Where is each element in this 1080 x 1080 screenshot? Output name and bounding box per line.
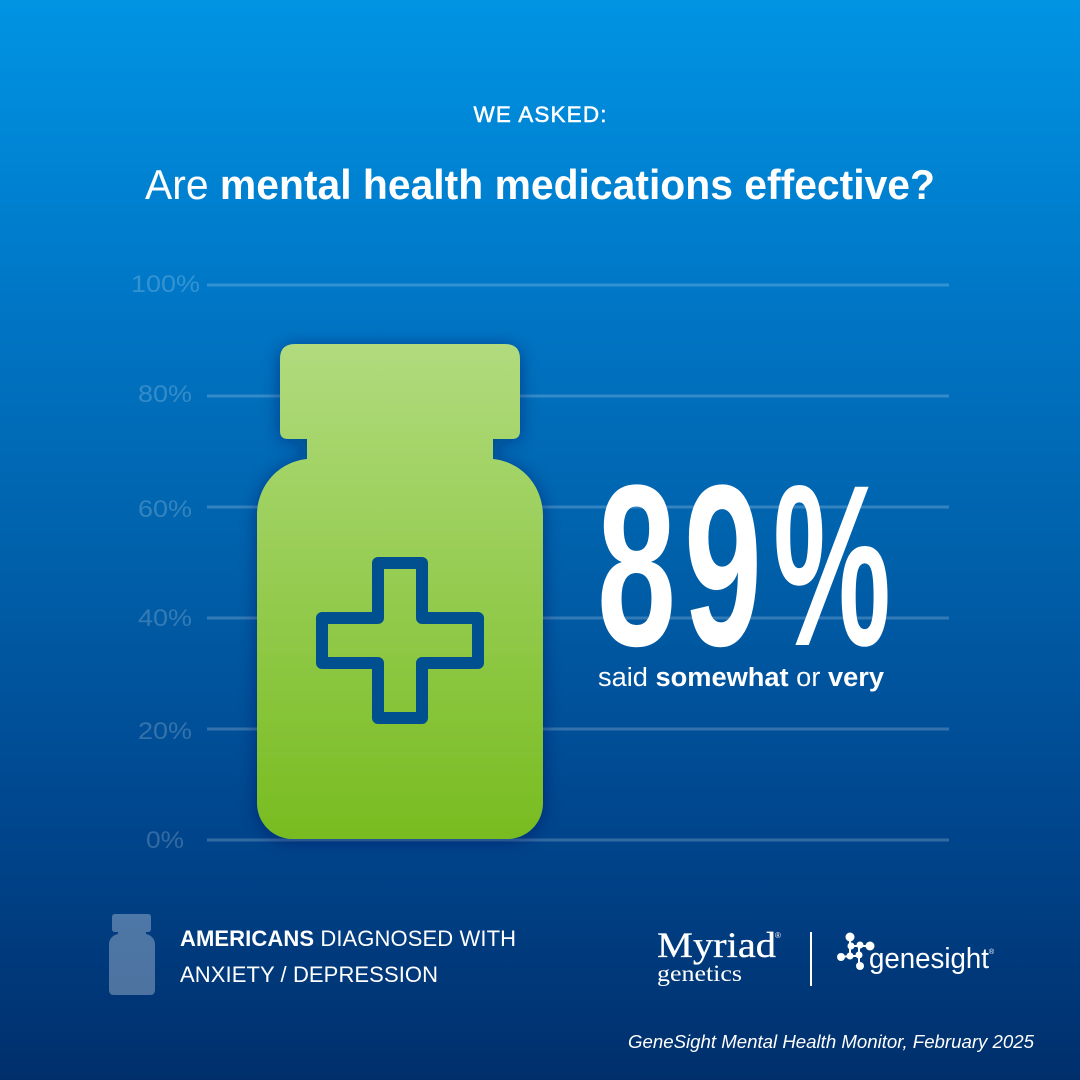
- logo: genesight: genesight: [869, 943, 989, 975]
- icon: legend bottle: [109, 914, 155, 995]
- legend: [109, 914, 522, 995]
- eyebrow: we asked: WE ASKED:: [474, 102, 606, 127]
- logo divider: [810, 932, 812, 986]
- big stat: 89%: %: [773, 437, 891, 694]
- logo: genesight: [837, 932, 995, 975]
- big stat: 89%: 8: [597, 437, 676, 694]
- logo: Myriad genetics: Myriad: [657, 925, 776, 965]
- legend text: AMERICANS DIAGNOSED WITH: [180, 926, 516, 951]
- logo: Myriad genetics: genetics: [657, 961, 742, 986]
- logo: Myriad genetics: [657, 925, 781, 986]
- chart: axis grid and labels: 60%: [138, 496, 192, 523]
- icon: green medicine bottle: [257, 344, 543, 839]
- icon: medical cross: [322, 563, 478, 718]
- big stat: 89%: [597, 437, 891, 694]
- chart: axis grid and labels: 100%: [131, 271, 200, 298]
- stat caption: said somewhat or very: [598, 664, 885, 692]
- title: Are mental health medications effective?: [145, 161, 935, 208]
- chart: axis grid and labels: 40%: [138, 605, 192, 632]
- chart: axis grid and labels: [131, 271, 949, 854]
- chart: axis grid and labels: 0%: [146, 827, 184, 854]
- chart: axis grid and labels: 20%: [138, 718, 192, 745]
- logo: genesight: ®: [989, 948, 995, 956]
- big stat: 89%: 9: [684, 437, 762, 694]
- logo: Myriad genetics: ®: [775, 931, 781, 940]
- legend text: ANXIETY / DEPRESSION: [180, 962, 438, 987]
- chart: axis grid and labels: 80%: [138, 381, 192, 408]
- source citation: GeneSight Mental Health Monitor, February 2025: [628, 1032, 1035, 1052]
